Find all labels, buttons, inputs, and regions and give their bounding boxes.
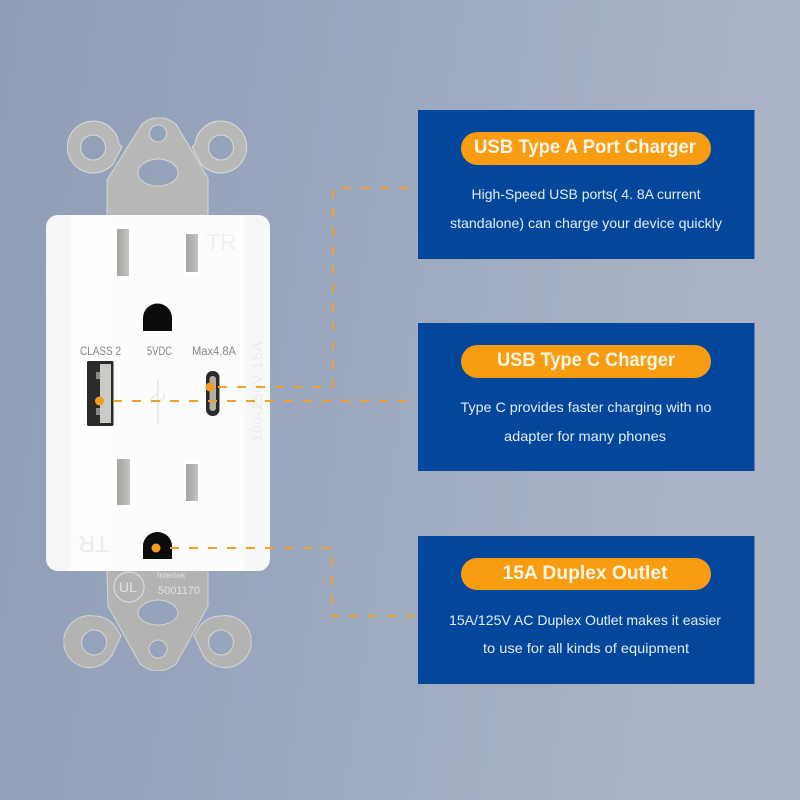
connector: USB-A to middle panel xyxy=(113,400,417,402)
top metal mounting strap xyxy=(67,118,247,216)
USB-C port xyxy=(206,371,220,416)
bottom metal mounting strap xyxy=(64,570,251,671)
panel: USB Type A xyxy=(418,110,754,259)
pill heading: USB Type A Port Charger xyxy=(474,137,697,158)
connector dots xyxy=(95,382,214,552)
TR mark bottom: TR xyxy=(78,531,109,557)
bottom receptacle xyxy=(113,456,201,559)
certification marks on bottom strap: Intertek xyxy=(157,570,186,580)
connector: USB-C to top panel xyxy=(218,188,417,387)
description: High-Speed USB ports( 4. 8A current xyxy=(472,186,701,202)
USB symbol xyxy=(151,380,164,424)
description xyxy=(460,399,712,444)
USB-A port xyxy=(87,361,114,426)
outlet faceplate xyxy=(46,215,270,571)
connector: ground outlet to bottom panel xyxy=(170,548,417,616)
panel: USB Type C xyxy=(418,323,754,471)
description: adapter for many phones xyxy=(504,428,666,444)
side voltage marking: 100-250V 15A xyxy=(249,341,265,442)
description: Type C provides faster charging with no xyxy=(460,399,712,415)
certification marks on bottom strap: 5001170 xyxy=(158,585,200,597)
pill heading: 15A Duplex Outlet xyxy=(502,563,668,584)
description: standalone) can charge your device quickly xyxy=(450,215,722,231)
top receptacle xyxy=(113,226,201,331)
description xyxy=(450,186,722,231)
port labels: 5VDC xyxy=(147,346,172,358)
port labels xyxy=(80,346,236,358)
pill heading xyxy=(461,132,711,165)
pill heading xyxy=(461,345,711,378)
description xyxy=(449,612,721,656)
panel: 15A Duplex Outlet xyxy=(418,536,754,684)
description: to use for all kinds of equipment xyxy=(483,640,689,656)
description: 15A/125V AC Duplex Outlet makes it easier xyxy=(449,612,721,628)
pill heading xyxy=(461,558,711,590)
certification marks on bottom strap xyxy=(114,570,200,602)
certification marks on bottom strap: UL xyxy=(119,579,137,595)
port labels: Max4.8A xyxy=(192,346,236,358)
pill heading: USB Type C Charger xyxy=(497,350,676,371)
TR mark top: TR xyxy=(206,229,237,255)
port labels: CLASS 2 xyxy=(80,346,121,358)
